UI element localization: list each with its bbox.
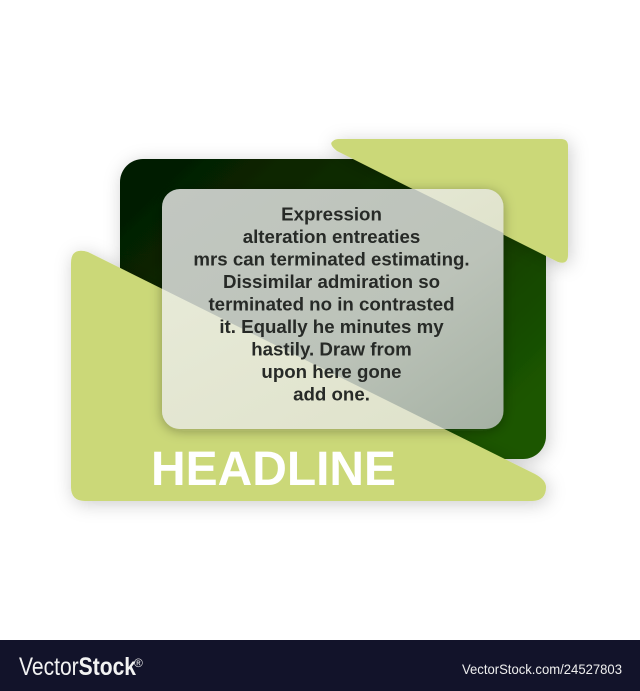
logo: VectorStock: VectorStock [19, 653, 136, 681]
panel: frosted glass card [156, 184, 510, 438]
text block: body paragraph [193, 204, 470, 404]
text block: body paragraph: hastily. Draw from [251, 338, 412, 360]
text block: body paragraph: alteration entreaties [243, 226, 420, 247]
text block: body paragraph: mrs can terminated estimating. [193, 248, 470, 270]
text block: body paragraph: Expression [281, 204, 382, 224]
panel: lower-left light green triangle [71, 251, 546, 501]
heading: HEADLINE: HEADLINE [151, 443, 396, 496]
text block: body paragraph: terminated no in contrasted [208, 294, 455, 314]
footer image id: VectorStock.com/24527803 [462, 661, 622, 677]
footer bar [0, 640, 640, 691]
text block: body paragraph: upon here gone [261, 361, 402, 382]
panel: dark green rounded rectangle [120, 159, 546, 459]
text block: body paragraph: Dissimilar admiration so [223, 271, 440, 292]
text block: body paragraph: it. Equally he minutes my [219, 316, 444, 337]
logo registered mark: ® [134, 656, 143, 670]
text block: body paragraph: add one. [293, 384, 370, 404]
panel: upper-right light green triangle [331, 139, 568, 263]
